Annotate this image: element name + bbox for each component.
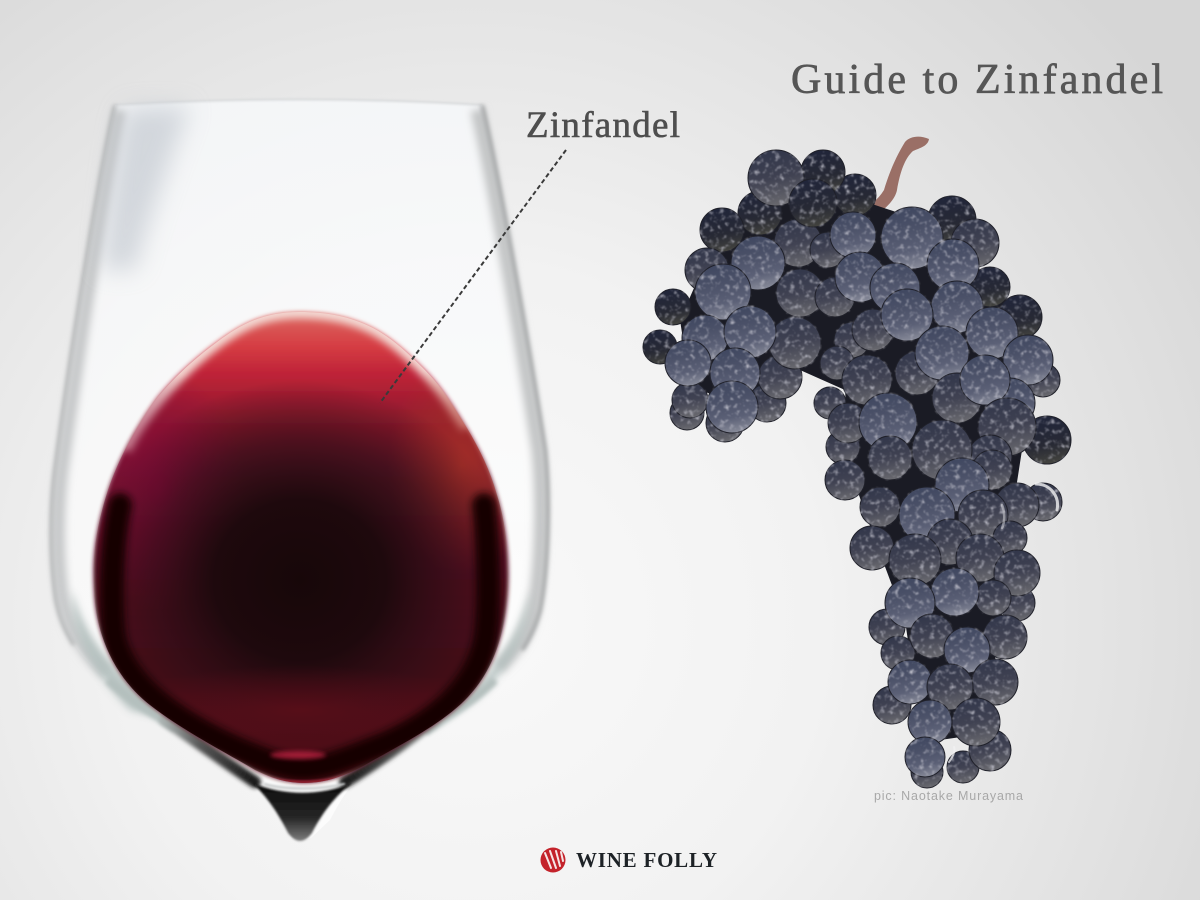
wine dark core [94, 387, 480, 750]
glass base shadow right [345, 720, 435, 782]
glass rim [115, 100, 482, 105]
pale line above tip [264, 784, 345, 788]
right wall edge [482, 105, 548, 650]
dark rim band [112, 505, 488, 769]
wine base [93, 312, 508, 783]
glass base outer edge right [425, 680, 495, 732]
wine shading [94, 312, 508, 783]
wine pale top edge [125, 312, 467, 450]
left wall soft [58, 110, 120, 673]
right cluster upper [810, 196, 1071, 480]
right cluster lower [825, 450, 1062, 788]
glass bowl [51, 100, 548, 842]
callout leader line [380, 150, 566, 403]
left blue-grey reflection [102, 106, 190, 270]
title: Guide to Zinfandel [791, 57, 1163, 103]
logo wordmark: WINE FOLLY [576, 848, 717, 872]
glass base outer edge left [108, 680, 175, 728]
grape highlights [949, 484, 1058, 762]
lower reflection pale green grey [72, 590, 530, 728]
left cluster [643, 150, 876, 442]
glass stem tip [252, 783, 352, 841]
wine crimson left tint [94, 378, 199, 569]
wine glass [51, 100, 548, 842]
left wall edge [51, 105, 115, 645]
glass base shadow left [165, 720, 255, 782]
wine warm right tint [406, 374, 506, 556]
callout label: Zinfandel [526, 105, 680, 146]
bottom red sliver [269, 774, 346, 783]
wine folly logo [540, 848, 717, 872]
wine lower red [182, 673, 421, 739]
photo credit: pic: Naotake Murayama [874, 789, 1023, 803]
logo icon [540, 848, 566, 872]
right wall soft [477, 110, 541, 668]
grape stem [860, 137, 929, 217]
grape bunch [643, 150, 1071, 788]
pink glow [270, 751, 326, 759]
bunch shadow [680, 185, 1030, 740]
